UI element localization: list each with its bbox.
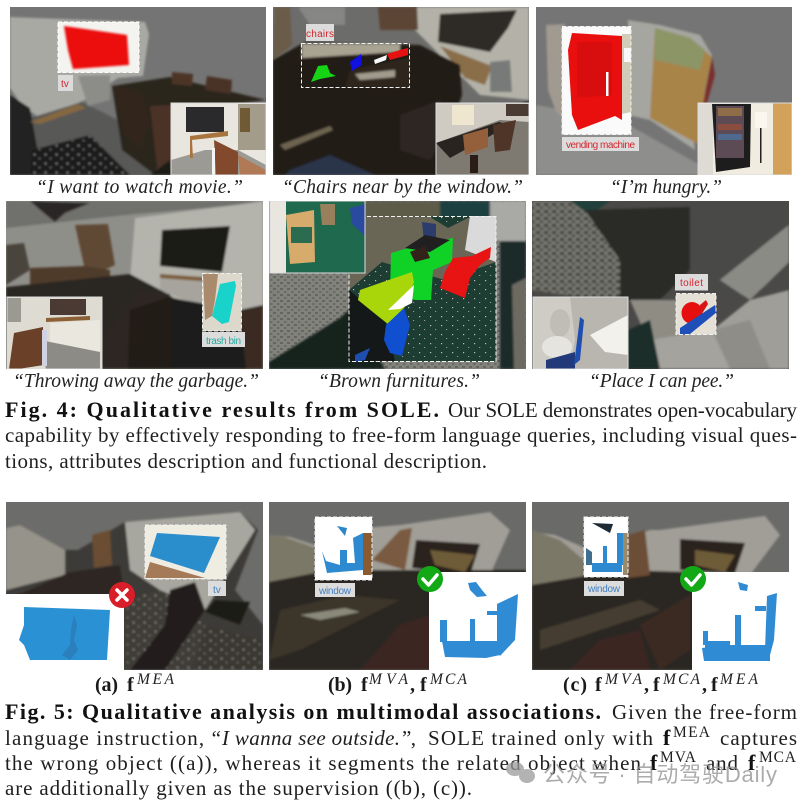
inset photo: toilet and sink [533, 297, 628, 369]
sublabel c: , [702, 674, 707, 696]
inset photo: room with tv [171, 103, 266, 175]
figure 5 caption text [5, 699, 797, 800]
dashed highlight with toilet [676, 294, 717, 335]
figure 4 caption text [5, 397, 798, 473]
sublabel c [563, 671, 759, 696]
sublabel b: f [361, 674, 368, 696]
figure 5 caption text: language instruction, “ [5, 726, 221, 750]
label: tv [208, 581, 226, 596]
sublabel c: MVA [604, 671, 643, 688]
panel c: fMVA fMCA fMEA result [532, 502, 792, 670]
figure 5 caption text: MVA [660, 749, 697, 766]
panel: brown furnitures query scene [269, 201, 526, 369]
figure 4 caption text: capability by effectively responding to free-form language queries, including visual ques- [5, 423, 797, 447]
panel: toilet query scene [532, 201, 789, 369]
label: vending machine: vending machine [566, 140, 635, 151]
figure 5 caption text: MCA [759, 749, 797, 766]
label: chairs: chairs [306, 29, 334, 40]
sublabel c: f [595, 674, 602, 696]
figure 5 caption text: the wrong object ((a)), whereas it segments the related object when [5, 751, 641, 775]
panel: vending machine query scene [536, 7, 792, 175]
sublabel c: , [644, 674, 649, 696]
sublabel c: f [711, 674, 718, 696]
sublabel b: (b) [328, 674, 352, 696]
window highlight box [584, 517, 628, 577]
label: trash bin [202, 332, 245, 347]
icon: wechat logo [506, 762, 535, 783]
figure 4 caption text: Fig. 4: Qualitative results from SOLE. [5, 397, 439, 422]
label: chairs [306, 24, 334, 41]
window highlight box [315, 517, 372, 580]
sublabel c: f [653, 674, 660, 696]
label: tv: tv [61, 79, 69, 90]
sublabel b: MVA [368, 671, 409, 688]
sublabel b: MCA [429, 671, 468, 688]
figure 5 caption text: ”, [402, 726, 416, 750]
label: trash bin: trash bin [206, 336, 241, 347]
label: toilet: toilet [680, 278, 703, 289]
vending machine highlight box [562, 26, 631, 134]
figure 4 caption text: Our SOLE demonstrates open-vocabulary [448, 398, 798, 422]
figure 5 caption text: f [748, 750, 756, 775]
inset photo: vending machine [698, 103, 792, 175]
dashed highlight with trash bin [202, 274, 242, 331]
inset photo: dining table [436, 103, 529, 175]
label: window: window [318, 586, 352, 597]
icon: red cross [109, 582, 135, 608]
figure 5 caption text: Fig. 5: Qualitative analysis on multimodal associations. [5, 699, 601, 724]
caption: place I can pee: “Place I can pee.” [589, 371, 734, 392]
label: window [584, 581, 624, 596]
panel: chairs query scene [273, 7, 529, 175]
dashed highlight with colored furniture [349, 216, 496, 362]
label: tv [58, 75, 73, 91]
inset photo: green carpet room [270, 201, 365, 273]
sublabel a [95, 671, 175, 696]
inset photo: room with console [7, 297, 102, 369]
figure 5 caption text: and [706, 751, 738, 775]
caption: chairs near by the window: “Chairs near by the window.” [282, 177, 523, 198]
white inset with segmented window [429, 572, 526, 670]
watermark: 公众号 · 自动驾驶Daily [543, 762, 777, 787]
white inset with segmented window [692, 572, 789, 670]
panel a: fMEA result [6, 502, 263, 670]
figure 5 caption text: I wanna see outside. [221, 726, 400, 750]
label: window: window [587, 584, 621, 595]
caption: brown furnitures: “Brown furnitures.” [318, 371, 480, 392]
caption: I'm hungry: “I’m hungry.” [610, 177, 722, 198]
figure 5 caption text: MEA [673, 724, 711, 741]
icon: green check [417, 566, 443, 592]
panel: tv query scene [10, 7, 266, 175]
panel b: fMVA fMCA result [269, 502, 526, 670]
white inset with segmented tv [6, 594, 124, 670]
sublabel b [328, 671, 468, 696]
sublabel a: f [127, 674, 134, 696]
sublabel c: MCA [662, 671, 701, 688]
sublabel a: (a) [95, 674, 118, 696]
label: tv: tv [213, 585, 221, 596]
sublabel a: MEA [136, 671, 175, 688]
sublabel c: (c) [563, 674, 587, 696]
figure 5 caption text: Given the free-form [612, 700, 797, 724]
figure 4 caption text: tions, attributes description and functional description. [5, 449, 487, 473]
caption: throwing away the garbage: “Throwing away the garbage.” [13, 371, 259, 392]
figure 5 caption text: captures [720, 726, 797, 750]
icon: green check [680, 566, 706, 592]
sublabel c: MEA [719, 671, 759, 688]
figure 5 caption text: f [663, 725, 671, 750]
figure 5 caption text: SOLE trained only with [428, 726, 654, 750]
tv highlight box [58, 22, 139, 72]
figure 5 caption text: are additionally given as the supervision ((b), (c)). [5, 776, 472, 800]
sublabel b: , [410, 674, 415, 696]
sublabel b: f [420, 674, 427, 696]
figure 5 caption text: f [650, 750, 658, 775]
label: toilet [675, 274, 708, 290]
label: window [315, 583, 355, 597]
tv highlight box [145, 525, 226, 579]
dashed highlight with segmented chairs [302, 44, 410, 88]
panel: trash bin query scene [6, 201, 263, 369]
caption: I want to watch movie: “I want to watch movie.” [36, 177, 243, 198]
